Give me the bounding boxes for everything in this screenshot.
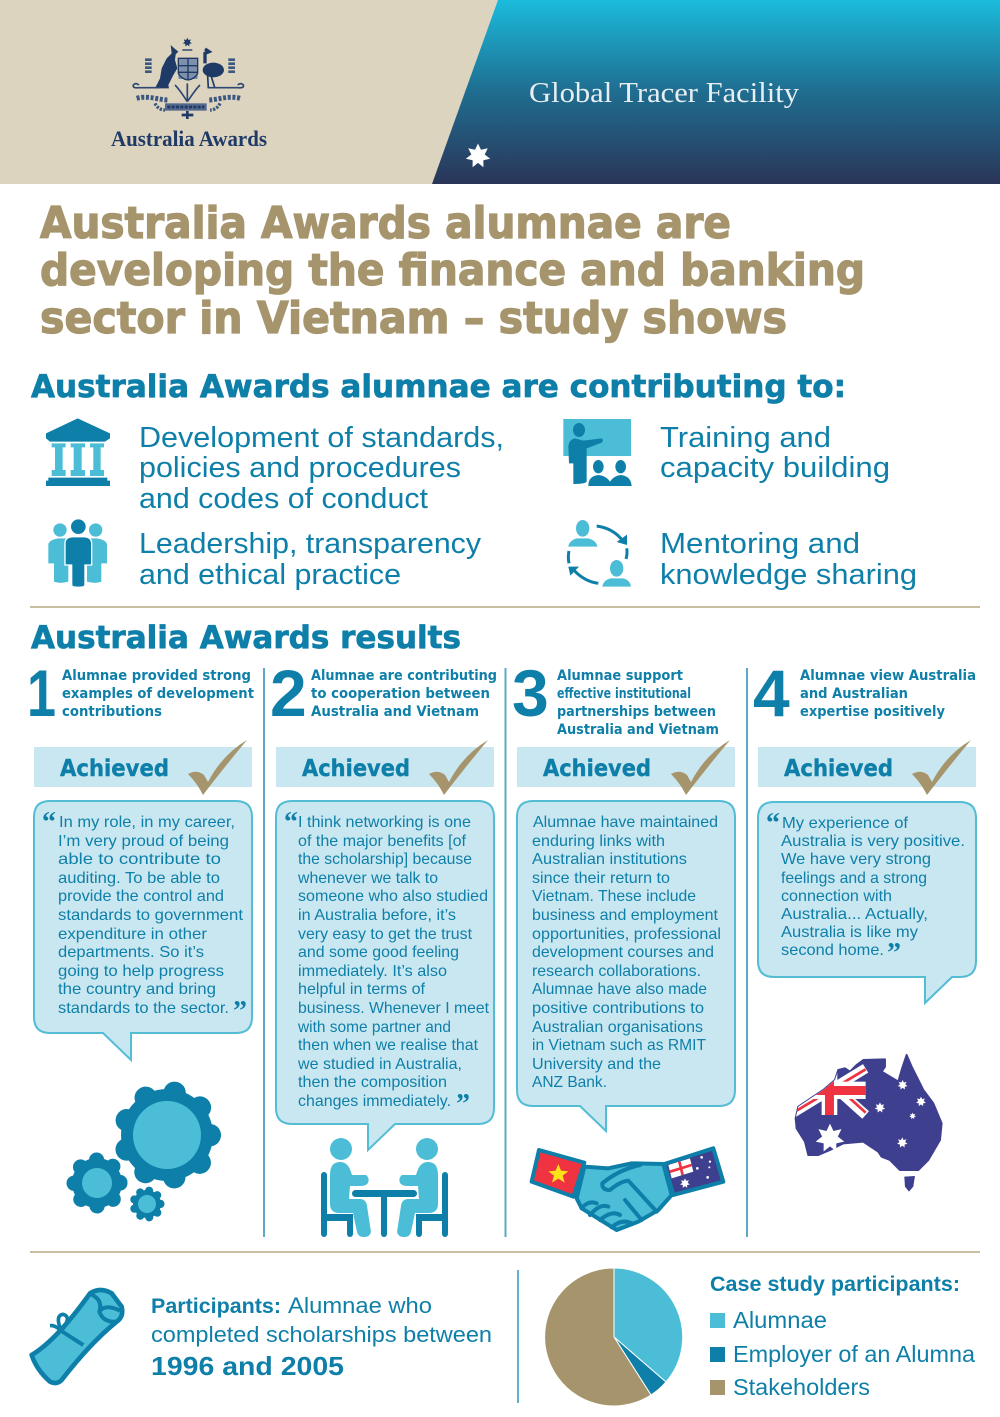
speech bubble quote: changes immediately. xyxy=(298,1093,451,1110)
result 1 heading: contributions xyxy=(62,704,162,720)
speech bubble quote: departments. So it’s xyxy=(58,944,204,961)
speech bubble quote: I think networking is one xyxy=(298,814,471,831)
result 4 heading xyxy=(800,668,976,720)
number 3: 3 xyxy=(512,656,549,730)
result 2 heading: Australia and Vietnam xyxy=(311,704,479,720)
text: leadership: Leadership, transparency xyxy=(139,528,482,560)
speech bubble quote: able to contribute to xyxy=(58,851,221,868)
text: leadership: and ethical practice xyxy=(139,559,401,591)
speech bubble quote: helpful in terms of xyxy=(298,981,426,998)
logo: Australia Awards coat of arms xyxy=(111,38,267,151)
text: participants: Participants: xyxy=(151,1295,281,1318)
icon: scholarship scroll xyxy=(32,1290,122,1383)
title: sector in Vietnam – study shows xyxy=(40,293,787,344)
result 3 heading: Australia and Vietnam xyxy=(557,722,719,738)
programme name: Global Tracer Facility xyxy=(529,77,800,109)
header banner xyxy=(0,0,1000,184)
speech bubble quote: “ xyxy=(766,808,780,839)
speech bubble quote: going to help progress xyxy=(58,963,224,980)
speech bubble quote: of the major benefits [of xyxy=(298,833,467,850)
icon: trainer at a board xyxy=(563,419,632,486)
logo wordmark: Australia Awards xyxy=(111,126,267,151)
heading: contributing to: Australia Awards alumnae are contributing to: xyxy=(31,369,846,405)
icon: group of people xyxy=(48,519,107,587)
text: mentoring xyxy=(660,528,917,591)
title: developing the finance and banking xyxy=(40,245,865,296)
result 3 heading: Alumnae support xyxy=(557,668,683,684)
speech bubble text: in Vietnam such as RMIT xyxy=(532,1037,706,1054)
number 2: 2 xyxy=(270,656,307,730)
achieved bar: Achieved xyxy=(784,756,893,782)
text: mentoring: knowledge sharing xyxy=(660,559,917,591)
icon: mentoring cycle xyxy=(568,520,631,587)
result 3 heading: partnerships between xyxy=(557,704,716,720)
result 3 heading: effective institutional xyxy=(557,686,691,702)
speech bubble quote: in Australia before, it’s xyxy=(298,907,456,924)
map: Australia with flag xyxy=(793,1055,942,1192)
speech bubble quote: standards to government xyxy=(58,907,244,924)
achieved bar: Achieved xyxy=(302,756,410,782)
text: mentoring: Mentoring and xyxy=(660,528,860,560)
text: training: capacity building xyxy=(660,452,890,484)
panel: result 1 xyxy=(27,656,254,1218)
icon: institution building xyxy=(46,418,110,486)
speech bubble quote: provide the control and xyxy=(58,888,224,905)
result 4 heading: Alumnae view Australia xyxy=(800,668,976,684)
speech bubble quote: with some partner and xyxy=(297,1019,451,1036)
speech bubble quote: we studied in Australia, xyxy=(297,1056,462,1073)
title xyxy=(40,198,865,344)
speech bubble quote: someone who also studied xyxy=(298,888,488,905)
speech bubble quote: “ xyxy=(284,807,298,838)
speech bubble text: Australian institutions xyxy=(532,851,687,868)
speech bubble quote: then when we realise that xyxy=(298,1037,479,1054)
panel: result 2 xyxy=(270,656,497,1237)
legend: case study participants: Alumnae xyxy=(733,1307,827,1333)
speech bubble text: University and the xyxy=(532,1056,661,1073)
speech bubble quote: Australia is very positive. xyxy=(781,833,965,850)
speech bubble quote xyxy=(758,802,976,1003)
speech bubble quote: ” xyxy=(233,996,247,1027)
title: Australia Awards alumnae are xyxy=(40,198,731,249)
speech bubble quote: expenditure in other xyxy=(58,926,208,943)
speech bubble quote: In my role, in my career, xyxy=(59,814,235,831)
result 1 heading: Alumnae provided strong xyxy=(62,668,251,684)
speech bubble quote: standards to the sector. xyxy=(58,1000,229,1017)
speech bubble text: research collaborations. xyxy=(532,963,701,980)
achieved bar xyxy=(276,740,494,795)
result 3 heading xyxy=(557,668,719,738)
speech bubble quote: My experience of xyxy=(782,815,909,832)
speech bubble quote xyxy=(34,801,252,1060)
speech bubble quote: feelings and a strong xyxy=(781,870,927,887)
text: training xyxy=(660,422,890,484)
text: participants: Alumnae who xyxy=(288,1293,432,1318)
heading: results: Australia Awards results xyxy=(31,620,461,656)
text: standards and policies: Development of standards, xyxy=(139,422,504,454)
icon: gears xyxy=(72,1089,213,1218)
result 4 heading: expertise positively xyxy=(800,704,945,720)
text: leadership xyxy=(139,528,482,591)
achieved bar xyxy=(758,740,976,795)
number 4: 4 xyxy=(753,656,790,730)
icon: Commonwealth star xyxy=(466,144,490,167)
speech bubble quote: Australia is like my xyxy=(781,924,918,941)
legend: case study participants: Stakeholders xyxy=(733,1374,870,1400)
speech bubble text: Australian organisations xyxy=(532,1019,703,1036)
icon: two people meeting at a table xyxy=(321,1138,448,1237)
text: training: Training and xyxy=(660,422,831,454)
text: participants: 1996 and 2005 xyxy=(151,1351,344,1381)
speech bubble quote: I’m very proud of being xyxy=(58,833,229,850)
result 2 heading xyxy=(311,668,497,720)
speech bubble quote: whenever we talk to xyxy=(297,870,438,887)
speech bubble quote: and some good feeling xyxy=(298,944,459,961)
speech bubble quote: very easy to get the trust xyxy=(298,926,473,943)
speech bubble quote xyxy=(276,801,494,1150)
result 2 heading: Alumnae are contributing xyxy=(311,668,497,684)
speech bubble quote: connection with xyxy=(781,888,892,905)
number 1: 1 xyxy=(27,656,56,730)
speech bubble quote: auditing. To be able to xyxy=(58,870,220,887)
text: participants: completed scholarships between xyxy=(151,1322,492,1347)
icon: handshake with flags xyxy=(532,1148,723,1230)
achieved bar: Achieved xyxy=(543,756,651,782)
speech bubble quote: ” xyxy=(456,1089,470,1120)
speech bubble text: Alumnae have also made xyxy=(532,981,707,998)
pie chart: case study participants xyxy=(545,1268,683,1406)
speech bubble text: Vietnam. These include xyxy=(532,888,696,905)
achieved bar xyxy=(34,740,252,795)
speech bubble quote: immediately. It’s also xyxy=(298,963,447,980)
speech bubble text: enduring links with xyxy=(532,833,665,850)
legend: case study participants xyxy=(710,1273,975,1400)
result 2 heading: to cooperation between xyxy=(311,686,490,702)
speech bubble quote: “ xyxy=(42,807,56,838)
result 4 heading: and Australian xyxy=(800,686,908,702)
speech bubble quote: the country and bring xyxy=(58,981,216,998)
panel: result 4 xyxy=(753,656,976,1192)
speech bubble text: positive contributions to xyxy=(532,1000,704,1017)
text: standards and policies: policies and procedures xyxy=(139,452,461,484)
speech bubble quote: the scholarship] because xyxy=(298,851,472,868)
legend: case study participants: Employer of an Alumna xyxy=(733,1341,975,1367)
speech bubble text: ANZ Bank. xyxy=(532,1074,607,1091)
achieved bar xyxy=(517,740,735,795)
speech bubble text: opportunities, professional xyxy=(532,926,721,943)
speech bubble text: development courses and xyxy=(532,944,714,961)
panel: result 3 xyxy=(512,656,735,1230)
speech bubble quote: We have very strong xyxy=(781,851,931,868)
result 1 heading xyxy=(62,668,254,720)
legend: case study participants: Case study participants: xyxy=(710,1273,960,1296)
speech bubble text: since their return to xyxy=(532,870,670,887)
text: participants xyxy=(151,1293,492,1381)
text: standards and policies xyxy=(139,422,504,515)
result 1 heading: examples of development xyxy=(62,686,254,702)
speech bubble quote: then the composition xyxy=(298,1074,447,1091)
speech bubble quote: ” xyxy=(887,938,901,969)
speech bubble quote: Australia... Actually, xyxy=(781,906,928,923)
achieved bar: Achieved xyxy=(60,756,169,782)
speech bubble text xyxy=(517,801,735,1131)
text: standards and policies: and codes of conduct xyxy=(139,483,428,515)
speech bubble quote: business. Whenever I meet xyxy=(298,1000,490,1017)
speech bubble quote: second home. xyxy=(781,942,884,959)
speech bubble text: business and employment xyxy=(532,907,719,924)
speech bubble text: Alumnae have maintained xyxy=(533,814,718,831)
